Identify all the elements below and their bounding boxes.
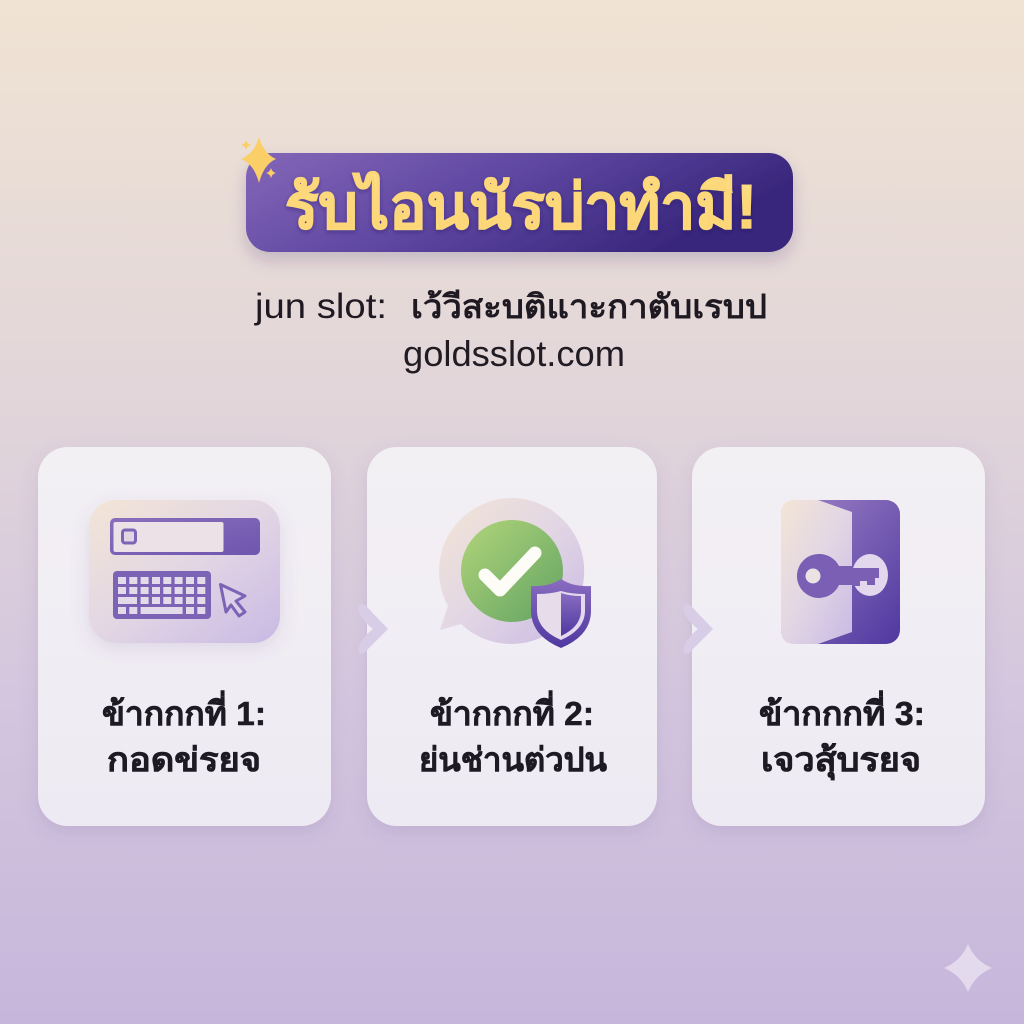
step 1 label bbox=[102, 690, 266, 778]
panel: step 1 bbox=[38, 447, 331, 826]
panel: step 3 bbox=[692, 447, 985, 826]
website address: goldsslot.com bbox=[403, 333, 625, 374]
icon: gold sparkles bbox=[241, 137, 276, 183]
step 2 label: ข้ากกกที่ 2: bbox=[430, 690, 594, 732]
icon: login form with keyboard and cursor bbox=[89, 500, 280, 643]
title banner bbox=[246, 153, 793, 252]
step 2 label: ย่นช่านต่วปน bbox=[419, 741, 607, 778]
arrow: step 1 to 2 bbox=[358, 604, 388, 654]
icon: corner sparkle bbox=[944, 944, 992, 992]
step 3 label: ข้ากกกที่ 3: bbox=[759, 690, 925, 732]
icon: door with key bbox=[781, 500, 900, 644]
step 3 label: เจวสุ้บรยจ bbox=[761, 741, 921, 781]
step 1 label: กอดข่รยจ bbox=[107, 741, 261, 778]
step 3 label bbox=[759, 690, 925, 781]
subtitle: jun slot: bbox=[254, 287, 387, 326]
panel: step 2 bbox=[367, 447, 657, 826]
arrow: step 2 to 3 bbox=[683, 604, 713, 654]
title text: รับไอนนัรบ่าทำมี! bbox=[285, 171, 757, 242]
subtitle: เว้วีสะบติแาะกาตับเรบป bbox=[411, 288, 767, 325]
subtitle bbox=[254, 287, 767, 326]
step 2 label bbox=[419, 690, 607, 778]
step 1 label: ข้ากกกที่ 1: bbox=[102, 690, 266, 732]
icon: check bubble with shield bbox=[439, 498, 591, 648]
